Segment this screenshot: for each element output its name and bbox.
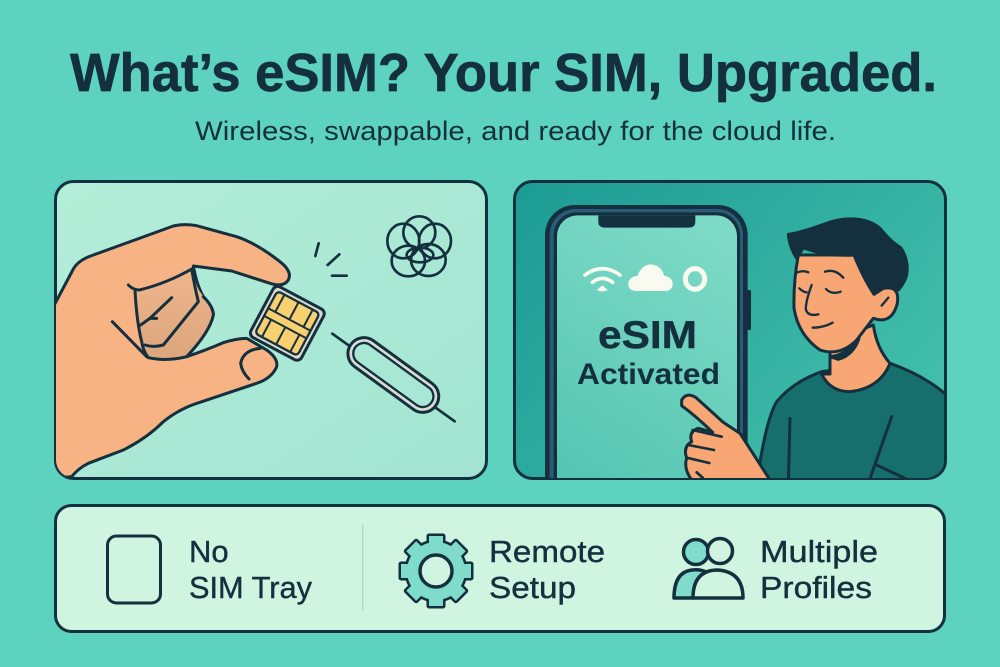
icon: spark lines: [315, 243, 347, 276]
icon: SIM card: [249, 285, 326, 362]
feature: multiple profiles: [674, 534, 878, 605]
icon: empty tray: [108, 536, 160, 603]
icon: SIM ejector pin: [332, 331, 455, 421]
phone: [545, 205, 751, 505]
icon: atom-like swirl logo: [387, 216, 451, 276]
label: Remote Setup: [489, 534, 605, 605]
phone label: eSIM: eSIM: [598, 314, 697, 357]
label: Remote Setup: Setup: [489, 570, 576, 605]
panel: physical SIM in hand: [53, 182, 486, 478]
icon: gear: [401, 536, 471, 606]
label: No SIM Tray: [189, 534, 312, 605]
icon: two users: [674, 538, 743, 598]
pointing hand: [682, 395, 770, 480]
panel: feature strip: [56, 506, 944, 632]
label: No SIM Tray: No: [189, 534, 229, 569]
icon: cloud: [628, 264, 673, 291]
title: What’s eSIM? Your SIM, Upgraded.: [70, 43, 937, 103]
icon: ring: [685, 269, 705, 289]
panel: eSIM activated on phone: [514, 182, 947, 505]
label: No SIM Tray: SIM Tray: [189, 570, 312, 605]
subtitle: Wireless, swappable, and ready for the cloud life.: [195, 116, 836, 146]
status icons: [585, 264, 705, 291]
label: Remote Setup: Remote: [489, 534, 605, 569]
person: [757, 219, 947, 485]
icon: wifi: [585, 269, 620, 291]
feature: remote setup: [401, 534, 605, 606]
phone label: Activated: Activated: [577, 358, 720, 391]
icon: hand holding SIM: [53, 225, 289, 478]
label: Multiple Profiles: Multiple: [760, 534, 878, 569]
label: Multiple Profiles: Profiles: [760, 570, 872, 605]
feature: no SIM tray: [108, 534, 312, 605]
label: Multiple Profiles: [760, 534, 878, 605]
